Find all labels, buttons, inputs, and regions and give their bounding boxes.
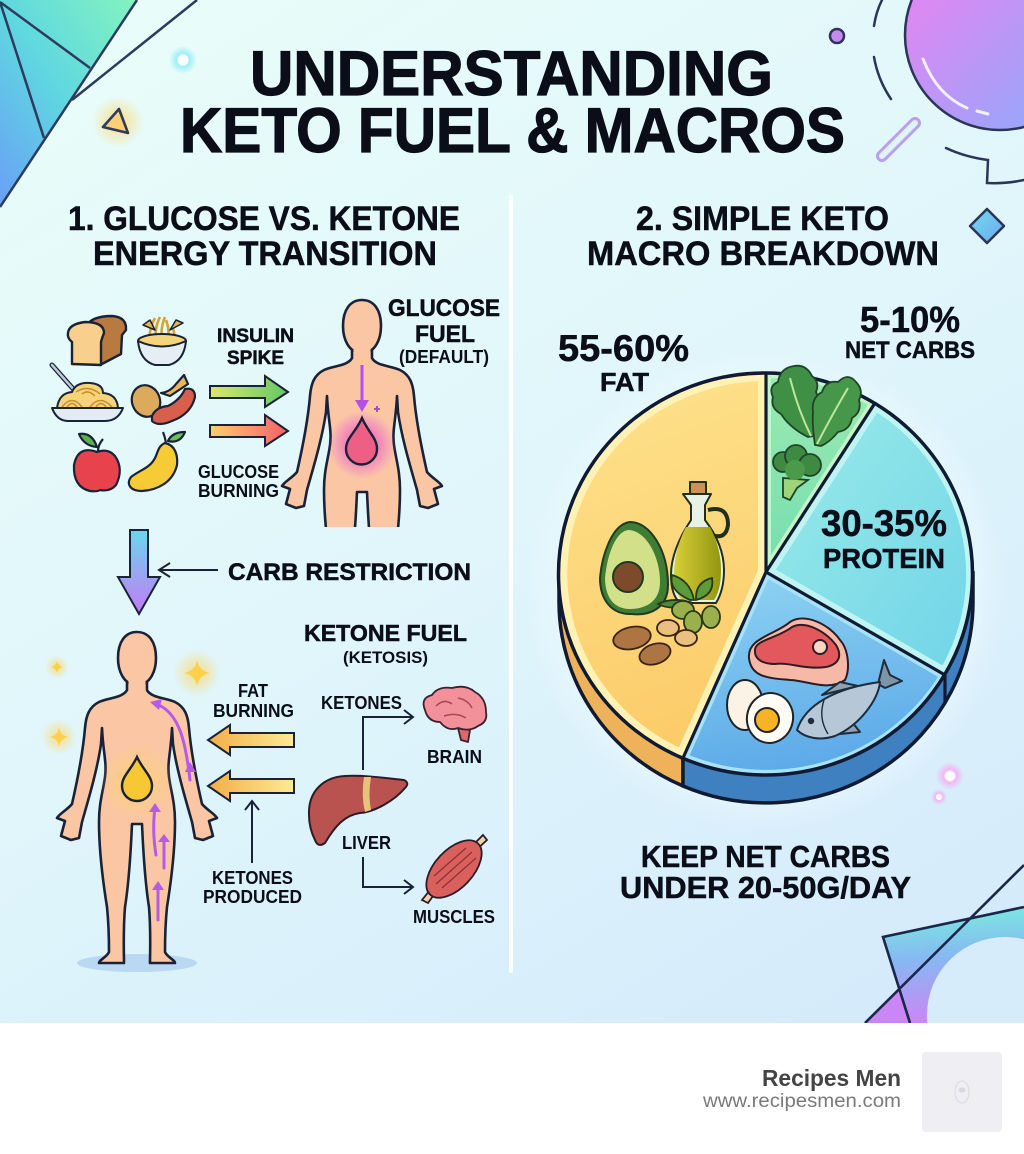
callout: net carb limit: KEEP NET CARBS: [641, 839, 890, 874]
footer brand text: Recipes Men: [762, 1065, 901, 1091]
label: 5-10% net carbs: NET CARBS: [845, 337, 975, 364]
icon: fish: [797, 660, 902, 738]
icon: brain: [424, 687, 486, 742]
section heading: macro breakdown: MACRO BREAKDOWN: [587, 235, 939, 273]
title: UNDERSTANDING: [250, 39, 773, 109]
icon: glucose drop with arrow: [328, 365, 396, 479]
label: ketones produced: [203, 868, 302, 907]
label: ketones produced: KETONES: [212, 868, 293, 888]
icon: steak: [749, 618, 848, 685]
icon: apple: [74, 434, 120, 491]
label: muscles: MUSCLES: [413, 907, 495, 927]
label: 55-60% fat: FAT: [600, 367, 649, 397]
body: glucose figure: [280, 298, 444, 527]
label: ketone fuel: (KETOSIS): [343, 648, 428, 667]
section heading: glucose vs ketone: [68, 200, 460, 273]
title: KETO FUEL & MACROS: [180, 96, 845, 166]
icon: mango: [129, 432, 185, 491]
label: 30-35% protein: [821, 503, 947, 574]
pie slice: net carbs: [766, 373, 875, 572]
icon: bread: [68, 316, 126, 365]
icon: fat drop: [99, 744, 175, 820]
label: 5-10% net carbs: [845, 299, 975, 364]
arrow: carb restriction pointer: [159, 563, 218, 577]
label: ketone fuel: KETONE FUEL: [304, 620, 467, 646]
label: 30-35% protein: 30-35%: [821, 503, 947, 544]
label: brain: BRAIN: [427, 747, 482, 767]
icon: eggs: [727, 680, 798, 747]
section heading: glucose vs ketone: ENERGY TRANSITION: [93, 235, 437, 273]
icon: noodle bowl: [138, 317, 186, 365]
label: insulin spike: [217, 326, 294, 369]
icon: spaghetti plate: [52, 365, 123, 421]
arrow: big downward transition: [118, 530, 160, 614]
label: glucose fuel: FUEL: [415, 321, 475, 348]
label: liver: LIVER: [342, 833, 391, 853]
footer logo placeholder: [922, 1052, 1002, 1132]
footer brand text: [702, 1065, 901, 1112]
section heading: macro breakdown: 2. SIMPLE KETO: [636, 200, 889, 238]
label: 55-60% fat: 55-60%: [558, 328, 689, 369]
label: insulin spike: INSULIN: [217, 326, 294, 347]
icon: broccoli: [773, 445, 821, 500]
label: fat burning: [213, 681, 294, 721]
pie slice: fat: [559, 373, 766, 758]
icon: liver: [309, 776, 407, 845]
icon: leafy greens: [771, 366, 861, 446]
arrow: fat burning lower: [208, 771, 294, 801]
section heading: glucose vs ketone: 1. GLUCOSE VS. KETONE: [68, 200, 460, 238]
pie slice: meat: [683, 572, 945, 775]
label: insulin spike: SPIKE: [227, 348, 284, 369]
callout: net carb limit: UNDER 20-50G/DAY: [620, 870, 911, 905]
arrow: glucose burning: [210, 415, 288, 446]
footer panel: [0, 1023, 1024, 1154]
pie chart: macro breakdown: [556, 371, 980, 806]
icon: olives and leaves: [658, 575, 720, 633]
decoration: top-right circle and arcs: [830, 0, 1024, 243]
arrow: liver to brain: [363, 710, 413, 770]
pie side: fat: [559, 574, 683, 786]
icon: potato and sausage: [127, 375, 195, 424]
title: [180, 39, 845, 166]
body: ketone figure: [57, 632, 217, 972]
icon: nuts: [611, 620, 697, 668]
label: glucose fuel: [388, 295, 500, 367]
label: 30-35% protein: PROTEIN: [823, 543, 945, 574]
decoration: bottom-right geometric shapes: [865, 865, 1024, 1093]
divider: [509, 195, 513, 973]
pie slice: protein: [766, 403, 973, 675]
arrow: ketones produced pointer: [245, 801, 259, 863]
label: fat burning: FAT: [238, 681, 268, 701]
label: ketones: KETONES: [321, 693, 402, 713]
label: fat burning: BURNING: [213, 701, 294, 721]
label: glucose burning: GLUCOSE: [198, 462, 279, 482]
pie side: protein: [683, 574, 973, 803]
decoration: top-left glow dot and triangle: [92, 46, 197, 148]
icon: sparkles: [41, 649, 221, 755]
icon: olive oil bottle: [671, 482, 728, 603]
icon: purple flow arrows: [149, 699, 196, 920]
label: glucose burning: BURNING: [198, 481, 279, 501]
label: ketone fuel: [304, 620, 467, 667]
icon: muscle: [416, 830, 492, 908]
label: glucose fuel: (DEFAULT): [399, 347, 489, 367]
label: ketones produced: PRODUCED: [203, 887, 302, 907]
footer brand text: www.recipesmen.com: [702, 1091, 901, 1112]
arrow: insulin spike: [210, 376, 288, 407]
pie outlines: [559, 373, 972, 775]
callout: net carb limit: [620, 839, 911, 905]
decoration: top-left geometric shapes: [0, 0, 197, 207]
label: carb restriction: CARB RESTRICTION: [228, 559, 471, 586]
label: 5-10% net carbs: 5-10%: [860, 299, 960, 340]
icon: avocado: [600, 522, 668, 614]
label: glucose burning: [198, 462, 279, 501]
arrow: fat burning upper: [208, 725, 294, 755]
label: 55-60% fat: [558, 328, 689, 397]
decoration: pink glow dots: [931, 762, 964, 805]
arrow: liver to muscles: [363, 857, 413, 894]
section heading: macro breakdown: [587, 200, 939, 273]
label: glucose fuel: GLUCOSE: [388, 295, 500, 322]
